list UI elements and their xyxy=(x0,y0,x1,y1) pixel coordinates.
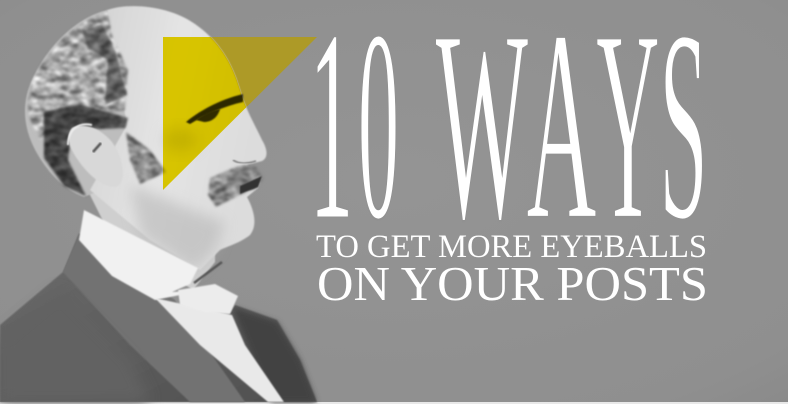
hair underlay xyxy=(25,10,135,197)
bow tie xyxy=(178,284,238,314)
cheek shade xyxy=(162,128,198,152)
sideburn xyxy=(126,132,166,184)
eyebrow xyxy=(186,94,243,124)
collar xyxy=(79,210,205,300)
triangle: background part xyxy=(163,37,317,190)
inner ear xyxy=(93,143,101,152)
head xyxy=(90,6,266,270)
subtitle line 2: ON YOUR POSTS xyxy=(317,256,708,311)
ear rim xyxy=(68,124,92,145)
right coat side xyxy=(232,307,316,402)
neck shadow xyxy=(194,262,222,283)
coat lapel xyxy=(63,235,245,402)
hair dark top xyxy=(82,24,127,105)
lower coat shading xyxy=(0,290,150,402)
moustache dark xyxy=(240,176,262,194)
hair dark lower xyxy=(44,104,128,196)
moustache xyxy=(208,165,263,207)
nostril xyxy=(233,160,256,163)
eye xyxy=(196,109,220,122)
portrait xyxy=(0,6,317,402)
subtitle line 1: TO GET MORE EYEBALLS xyxy=(316,229,707,265)
neck xyxy=(85,185,215,290)
bottom edge xyxy=(0,402,788,404)
triangle: yellow overlay on head xyxy=(163,37,246,190)
title: 10 WAYS xyxy=(310,0,708,277)
face shading xyxy=(130,185,225,272)
shirt front xyxy=(155,298,284,402)
ear xyxy=(69,126,123,187)
hair light texture xyxy=(28,12,128,140)
coat xyxy=(0,233,317,402)
